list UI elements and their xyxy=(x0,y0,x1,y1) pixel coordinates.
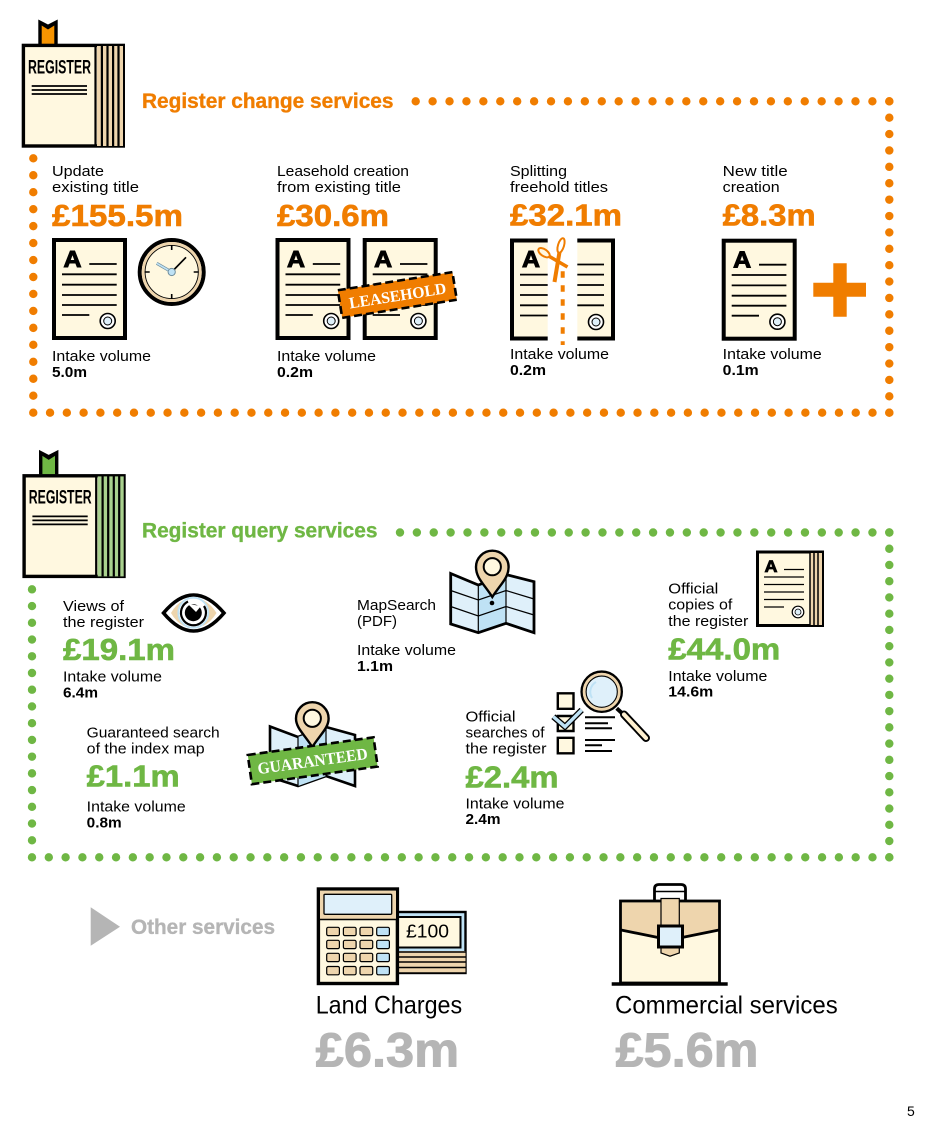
service: update existing title xyxy=(52,163,204,381)
icon: briefcase xyxy=(612,884,728,984)
service: official copies of the register: Intake volume xyxy=(668,668,767,685)
service: views of the register: the register xyxy=(63,614,144,631)
service: new title creation xyxy=(723,163,866,379)
service: splitting freehold titles: A xyxy=(522,246,540,272)
service: leasehold creation: A xyxy=(287,246,305,272)
service: splitting freehold titles: Splitting xyxy=(510,163,567,180)
service: mapsearch: Intake volume xyxy=(357,642,456,659)
service: land charges: £6.3m xyxy=(316,1025,459,1078)
panel: other services xyxy=(91,884,838,1078)
service: leasehold creation xyxy=(277,163,457,381)
service: mapsearch xyxy=(357,551,534,675)
service: new title creation: A xyxy=(733,247,751,273)
heading: other services: Other services xyxy=(131,916,275,939)
service: guaranteed search of the index map: Intake volume xyxy=(87,798,186,815)
service: new title creation: 0.1m xyxy=(723,362,759,379)
service: splitting freehold titles: £32.1m xyxy=(510,198,622,232)
service: guaranteed search of the index map: GUARANTEED xyxy=(256,744,369,778)
service: leasehold creation: Leasehold creation xyxy=(277,163,409,180)
service: views of the register: Views of xyxy=(63,598,125,615)
icon: green register book xyxy=(24,450,124,576)
service: commercial services: £5.6m xyxy=(616,1025,758,1078)
icon: green register book: REGISTER xyxy=(29,488,92,509)
service: official searches of the register: 2.4m xyxy=(466,811,500,828)
icon: calculator xyxy=(318,889,397,984)
service: official copies of the register: £44.0m xyxy=(668,631,780,666)
service: leasehold creation: £30.6m xyxy=(277,198,389,233)
service: new title creation: £8.3m xyxy=(723,198,816,232)
service: update existing title: Update xyxy=(52,163,104,180)
panel: register query services xyxy=(24,450,890,858)
service: official copies of the register: A xyxy=(764,557,778,576)
service: land charges: Land Charges xyxy=(316,991,462,1019)
service: leasehold creation: A xyxy=(374,246,392,272)
service: update existing title: existing title xyxy=(52,179,139,196)
icon: orange register book xyxy=(23,20,123,146)
service: official searches of the register: £2.4m xyxy=(466,759,558,794)
page number: 5 xyxy=(907,1103,915,1119)
icon: grey arrow xyxy=(91,907,120,946)
service: guaranteed search of the index map: of the index map xyxy=(87,740,205,757)
service: views of the register: Intake volume xyxy=(63,669,162,686)
service: land charges xyxy=(316,889,466,1078)
service: guaranteed search of the index map: £1.1m xyxy=(87,759,180,794)
service: commercial services: Commercial services xyxy=(615,991,838,1019)
service: official copies of the register: Official xyxy=(668,580,718,597)
service: leasehold creation: LEASEHOLD xyxy=(348,280,447,313)
service: guaranteed search of the index map xyxy=(87,702,378,831)
service: views of the register xyxy=(63,595,224,702)
service: official searches of the register: searches of xyxy=(466,725,545,742)
service: mapsearch: 1.1m xyxy=(357,658,393,675)
service: splitting freehold titles: Intake volume xyxy=(510,346,609,363)
service: leasehold creation: 0.2m xyxy=(277,364,313,381)
service: official copies of the register: the register xyxy=(668,613,748,630)
service: guaranteed search of the index map: Guaranteed search xyxy=(87,724,220,741)
service: new title creation: creation xyxy=(723,179,780,196)
service: views of the register: £19.1m xyxy=(63,632,175,667)
dotted border: orange xyxy=(33,101,890,413)
dotted border: green xyxy=(32,532,890,858)
service: update existing title: £155.5m xyxy=(52,198,183,233)
service: official copies of the register: copies of xyxy=(668,596,733,614)
heading: register change services: Register change services xyxy=(142,90,394,113)
icon: orange register book: REGISTER xyxy=(28,57,91,78)
service: commercial services xyxy=(612,884,838,1078)
service: official searches of the register: Official xyxy=(466,709,516,726)
service: update existing title: A xyxy=(64,246,82,272)
service: guaranteed search of the index map: 0.8m xyxy=(87,814,122,831)
service: official searches of the register xyxy=(466,672,646,828)
service: mapsearch: (PDF) xyxy=(357,613,397,630)
service: update existing title: Intake volume xyxy=(52,348,151,365)
service: views of the register: 6.4m xyxy=(63,685,98,702)
service: official searches of the register: the register xyxy=(466,740,546,757)
heading: register query services: Register query services xyxy=(142,520,378,542)
service: new title creation: Intake volume xyxy=(723,346,822,363)
service: official copies of the register xyxy=(668,551,822,701)
service: official searches of the register: Intake volume xyxy=(466,795,564,812)
service: leasehold creation: Intake volume xyxy=(277,348,376,365)
service: official copies of the register: 14.6m xyxy=(668,684,713,701)
service: splitting freehold titles: freehold titles xyxy=(510,179,608,196)
service: leasehold creation: from existing title xyxy=(277,179,401,196)
service: splitting freehold titles: 0.2m xyxy=(510,362,546,379)
service: update existing title: 5.0m xyxy=(52,364,87,381)
service: mapsearch: MapSearch xyxy=(357,597,436,614)
icon: banknotes: £100 xyxy=(406,922,449,942)
service: splitting freehold titles xyxy=(510,163,622,379)
service: new title creation: New title xyxy=(723,163,788,180)
icon: banknotes xyxy=(396,912,466,973)
panel: register change services xyxy=(23,20,890,413)
